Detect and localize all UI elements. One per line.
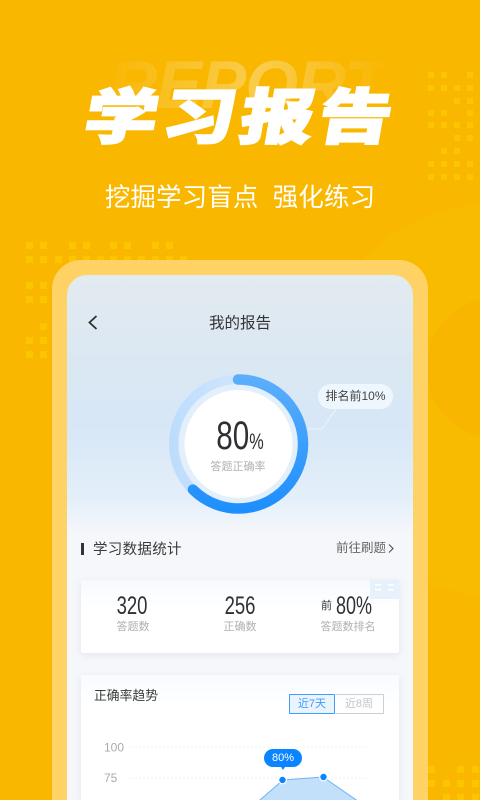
link: go practise: 前往刷题 — [336, 541, 386, 555]
section title: 学习数据统计 — [93, 542, 182, 558]
book decoration — [370, 580, 399, 599]
rank callout: 排名前10% — [325, 389, 386, 403]
trend card — [81, 675, 399, 800]
stat: correct answers: 256 — [225, 592, 255, 620]
line chart: 100 — [104, 740, 124, 754]
ghost word REPORT: REPORT — [108, 47, 385, 123]
gauge value: 80% — [216, 414, 264, 458]
back arrow — [88, 315, 98, 330]
page heading: 我的报告 — [209, 315, 271, 332]
phone screen — [67, 275, 413, 800]
phone frame — [52, 260, 428, 800]
tooltip pill: 80% — [272, 752, 294, 764]
stat: questions answered: 320 — [117, 592, 147, 620]
tooltip pill — [264, 749, 302, 767]
subtitle: 挖掘学习盲点 强化练习 — [105, 184, 375, 212]
stat: questions answered: 答题数 — [116, 621, 150, 633]
rank connector — [308, 409, 336, 430]
toggle: 8 weeks — [335, 694, 384, 714]
tooltip pointer — [280, 767, 284, 770]
rank value: 80% — [336, 592, 372, 620]
chevron — [388, 544, 394, 553]
section heading — [81, 541, 182, 558]
line chart: 75 — [104, 771, 118, 785]
stats card — [81, 580, 399, 653]
accuracy gauge — [169, 374, 308, 514]
rank prefix: 前 — [321, 600, 332, 612]
toggle: 7 days — [289, 694, 335, 714]
gauge label: 答题正确率 — [210, 461, 266, 473]
rank callout — [318, 384, 393, 409]
stat: rank — [320, 592, 376, 633]
toggle: 7 days: 近7天 — [298, 698, 326, 710]
section marker — [81, 543, 84, 555]
toggle: 8 weeks: 近8周 — [345, 698, 373, 710]
trend title: 正确率趋势 — [94, 688, 158, 703]
stat: correct answers — [224, 592, 256, 633]
range toggle — [289, 694, 384, 714]
line chart — [104, 740, 365, 800]
rank label: 答题数排名 — [320, 621, 376, 633]
stat: questions answered — [116, 592, 150, 633]
stat: correct answers: 正确数 — [224, 621, 256, 633]
title: 学习报告 — [78, 70, 406, 156]
